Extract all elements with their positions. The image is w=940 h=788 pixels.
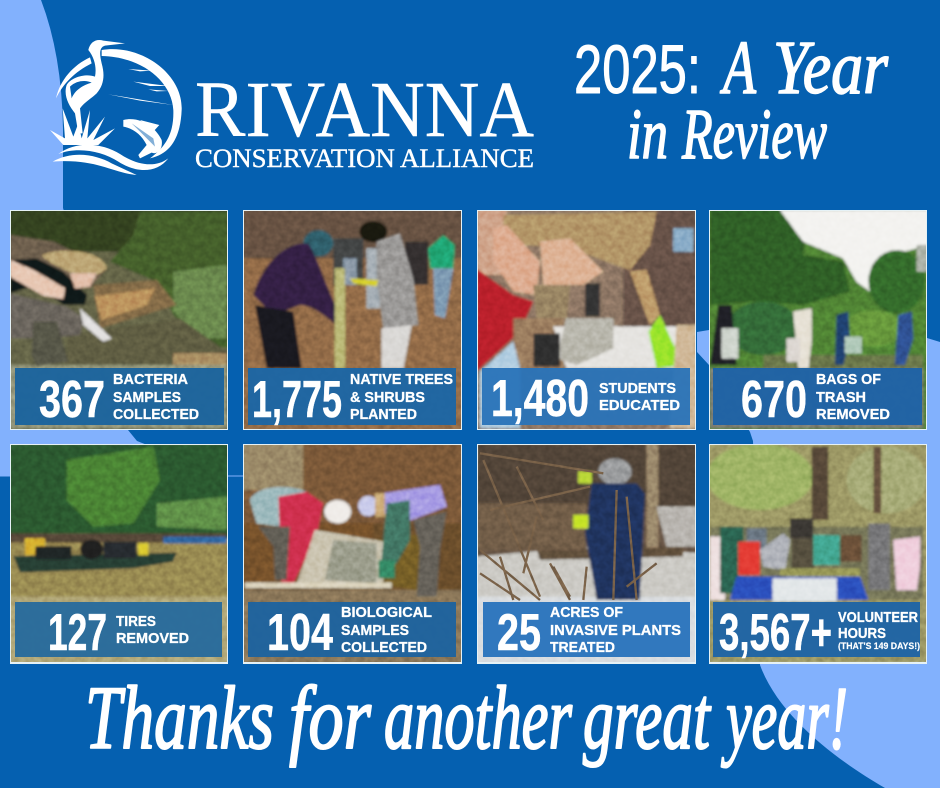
stat label box [713,368,922,425]
background shape: left light blue [0,0,243,476]
stat caption [838,609,920,651]
stat caption: ACRES OF [550,604,623,621]
panel: invasive plants [477,443,700,664]
stat label box [482,368,690,425]
wordmark: RIVANNA [195,67,534,154]
stat caption: SAMPLES [341,622,409,639]
title: in [627,94,668,174]
stat label box [713,602,920,657]
panel: volunteer hours [707,443,930,664]
title: Year [773,26,888,110]
stat caption: (THAT'S 149 DAYS!) [838,641,920,651]
stat caption [350,371,453,423]
wordmark: CONSERVATION ALLIANCE [195,144,534,173]
photo: student at microscope [473,208,700,432]
panel: tires removed [7,443,233,667]
photo: volunteers planting trees [240,208,467,432]
stat caption: VOLUNTEER [838,609,918,626]
panel: bacteria samples [7,208,233,432]
panel: trash removed [703,208,930,432]
stat caption: COLLECTED [113,406,199,423]
stat: 25: 25 [497,604,541,662]
closing message: Thanks [85,669,274,768]
panel: biological samples [240,443,467,667]
closing message [85,669,848,768]
stat caption [550,604,681,656]
stat: 3,567+: 3,567+ [719,604,832,662]
stat label box [15,368,224,425]
photo: volunteer group behind table [707,443,930,663]
stat caption: PLANTED [350,406,417,423]
photo: volunteers carrying trash bags [703,208,930,432]
logo [50,40,534,175]
photo: two people with stream net [240,443,467,667]
title [574,26,888,174]
stat caption: TIRES [116,613,156,630]
stat caption: BAGS OF [816,371,881,388]
panel: trees planted [240,208,467,432]
stat caption [341,604,432,656]
photo: canoe full of tires [7,443,233,667]
stat: 1,480: 1,480 [491,370,589,428]
stat caption: INVASIVE PLANTS [550,622,681,639]
stat caption: COLLECTED [341,639,427,656]
stat: 670: 670 [741,371,807,429]
photo: worker among bare branches in snow [477,443,700,663]
closing message: for [289,669,372,768]
stat caption: TRASH [816,389,866,406]
panel: students educated [473,208,700,432]
closing message: another [384,669,573,768]
stat caption: & SHRUBS [350,389,425,406]
closing message: great [583,669,711,768]
icon: heron and fish emblem [50,40,182,175]
stat: 1,775: 1,775 [252,371,342,429]
closing message: year! [721,669,848,768]
stat caption: SAMPLES [113,389,181,406]
stat label box [248,602,456,657]
stat label box [248,368,456,425]
stat caption: EDUCATED [599,397,680,414]
stat caption: NATIVE TREES [350,371,453,388]
title: A [719,26,756,110]
stat caption: HOURS [838,625,886,642]
photo: woman sampling stream [7,208,233,432]
stat caption: BACTERIA [113,371,188,388]
stat caption: TREATED [550,639,615,656]
stat caption [113,371,199,423]
stat caption: STUDENTS [599,380,676,397]
background shape: right light blue [697,330,940,788]
stat label box [15,602,222,657]
stat: 367: 367 [39,371,105,429]
stat: 127: 127 [48,604,107,662]
title: Review [681,94,827,174]
stat caption [116,613,189,647]
stat caption [599,380,680,414]
title: 2025: [574,31,701,108]
stat caption [816,371,890,423]
stat caption: REMOVED [116,630,189,647]
stat caption: REMOVED [816,406,890,423]
stat caption: BIOLOGICAL [341,604,432,621]
stat: 104: 104 [267,604,333,662]
stat label box [483,602,690,657]
